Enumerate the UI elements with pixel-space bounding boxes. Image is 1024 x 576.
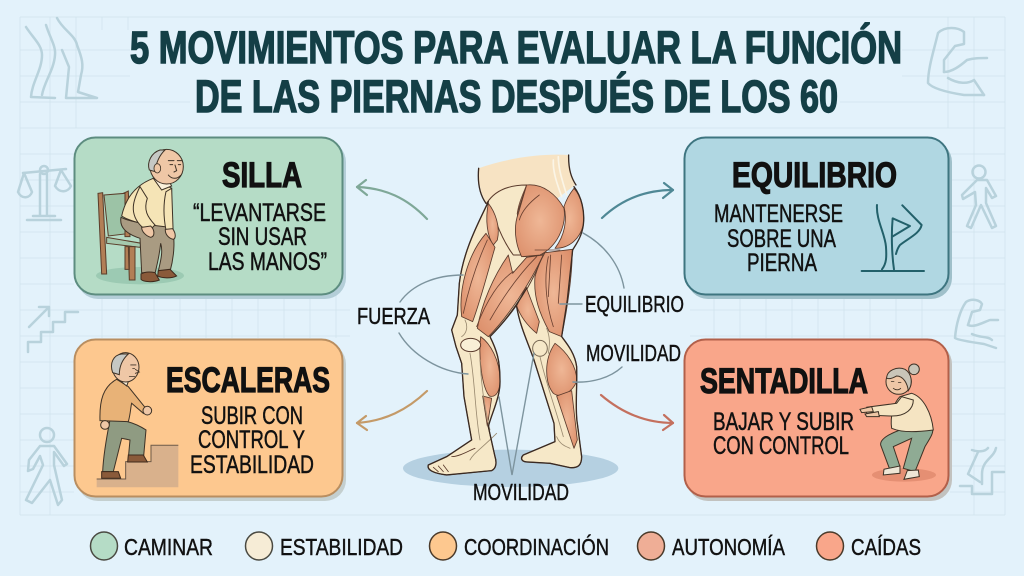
arrow: to sentadilla bbox=[601, 395, 673, 430]
icon: balance scale bbox=[18, 166, 71, 220]
text: subir con control y estabilidad bbox=[190, 402, 314, 479]
arrow: to escaleras bbox=[357, 391, 427, 430]
floor shadow bbox=[403, 450, 618, 487]
leg outlines bbox=[428, 187, 584, 475]
illustration: woman squatting bbox=[860, 364, 936, 482]
kneecap rear bbox=[533, 340, 547, 356]
heading: sentadilla: SENTADILLA bbox=[700, 362, 868, 401]
heading: equilibrio: EQUILIBRIO bbox=[732, 156, 897, 195]
panel: equilibrio bbox=[684, 138, 952, 299]
icon: legs outline bbox=[26, 18, 97, 98]
front leg silhouette bbox=[428, 202, 543, 475]
hamstring bbox=[535, 249, 572, 337]
thigh inner bbox=[477, 255, 543, 337]
text: levantarse sin usar las manos: “LEVANTARSE bbox=[193, 199, 326, 227]
muscle fibres bbox=[463, 185, 562, 327]
label: movilidad right: MOVILIDAD bbox=[586, 340, 681, 366]
icon: leg balance bbox=[862, 205, 924, 271]
outer hip muscle bbox=[487, 203, 498, 245]
toes bbox=[433, 448, 475, 472]
text: bajar y subir con control: CON CONTROL bbox=[713, 432, 849, 460]
icon: walker left bbox=[26, 428, 67, 505]
text: levantarse sin usar las manos: SIN USAR bbox=[218, 223, 307, 251]
icon: stairs with arrow bbox=[28, 307, 78, 352]
shin muscle rear bbox=[557, 391, 577, 448]
text: subir con control y estabilidad: CONTROL Y bbox=[198, 426, 305, 454]
hip tendon bbox=[487, 185, 527, 255]
tendon lines bbox=[462, 320, 570, 460]
text: subir con control y estabilidad: ESTABILIDAD bbox=[190, 451, 314, 479]
legend item: autonomía: AUTONOMÍA bbox=[672, 534, 786, 560]
illustration: leg anatomy bbox=[403, 155, 618, 487]
legend item: caminar bbox=[90, 532, 213, 560]
waist tendon lines bbox=[553, 157, 567, 197]
arrow: to silla bbox=[357, 180, 427, 219]
legend item: autonomía bbox=[638, 532, 786, 560]
legend item: coordinación: COORDINACIÓN bbox=[464, 534, 609, 560]
icon: flexed arm middle bbox=[955, 300, 998, 348]
calf front bbox=[480, 337, 500, 396]
legend bbox=[90, 532, 921, 560]
text: mantenerse sobre una pierna bbox=[714, 200, 843, 277]
inner rear thigh bbox=[517, 287, 539, 333]
label: movilidad bottom: MOVILIDAD bbox=[473, 479, 569, 505]
text: bajar y subir con control bbox=[713, 408, 854, 460]
text: bajar y subir con control: BAJAR Y SUBIR bbox=[713, 408, 854, 436]
rear leg silhouette bbox=[517, 250, 582, 468]
panel: escaleras bbox=[74, 340, 346, 501]
text: levantarse sin usar las manos bbox=[193, 199, 327, 276]
kneecap front bbox=[461, 338, 481, 352]
label: equilibrio: EQUILIBRIO bbox=[585, 291, 684, 317]
panel: silla bbox=[74, 138, 346, 299]
heading: silla: SILLA bbox=[222, 156, 302, 195]
legend item: caminar: CAMINAR bbox=[124, 534, 213, 560]
icon: walker right bbox=[962, 166, 996, 228]
text: subir con control y estabilidad: SUBIR CON bbox=[201, 402, 303, 430]
icon: figure on stairs bbox=[960, 448, 1004, 494]
calf rear bbox=[547, 343, 577, 395]
arrow: to equilibrio bbox=[602, 183, 673, 218]
text: mantenerse sobre una pierna: PIERNA bbox=[747, 249, 817, 277]
text: mantenerse sobre una pierna: MANTENERSE bbox=[714, 200, 843, 228]
label: fuerza: FUERZA bbox=[357, 303, 431, 329]
panel: sentadilla bbox=[684, 340, 952, 501]
illustration: man climbing stairs bbox=[97, 353, 178, 487]
text: levantarse sin usar las manos: LAS MANOS” bbox=[208, 248, 327, 276]
thigh front bbox=[461, 233, 495, 322]
legend item: caídas: CAÍDAS bbox=[851, 534, 921, 560]
glute second bbox=[555, 188, 584, 248]
legend item: coordinación bbox=[430, 532, 609, 560]
glute main bbox=[515, 185, 564, 257]
title bbox=[130, 22, 902, 122]
text: mantenerse sobre una pierna: SOBRE UNA bbox=[727, 225, 836, 253]
legend item: caídas bbox=[816, 532, 921, 560]
trunk bbox=[478, 155, 575, 207]
leader lines bbox=[399, 233, 624, 475]
illustration: man rising from chair bbox=[96, 149, 184, 284]
heading: escaleras: ESCALERAS bbox=[166, 361, 330, 400]
shin muscle front bbox=[483, 396, 492, 426]
title: DE LAS PIERNAS DESPUÉS DE LOS 60 bbox=[195, 71, 838, 122]
legend item: estabilidad: ESTABILIDAD bbox=[280, 534, 403, 560]
icon: flexed arm top bbox=[928, 28, 987, 95]
legend item: estabilidad bbox=[246, 532, 403, 560]
